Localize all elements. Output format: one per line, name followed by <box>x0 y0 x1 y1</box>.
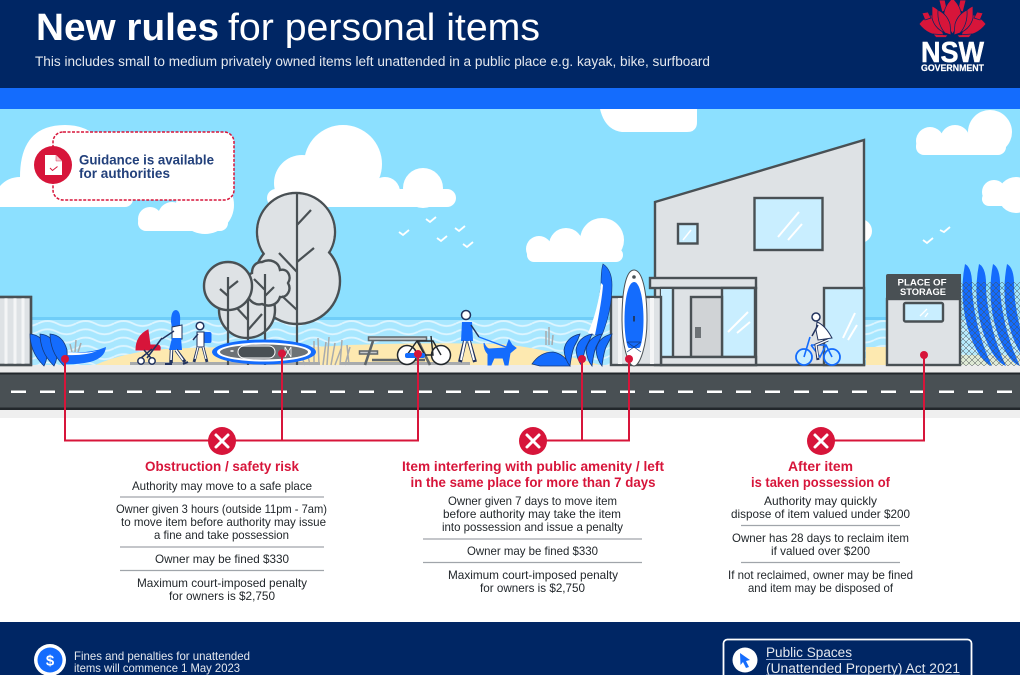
title: New rules <box>36 7 219 49</box>
ground shadow <box>130 362 320 365</box>
place of storage: STORAGE <box>900 287 946 297</box>
leaning surfboard <box>588 264 612 335</box>
blue kayak pile right <box>532 334 612 366</box>
text rows: Maximum court-imposed penalty <box>448 568 618 582</box>
callout text: for authorities <box>79 166 170 181</box>
picnic table <box>360 337 430 365</box>
small window <box>678 224 698 244</box>
left shed <box>0 297 31 365</box>
shed with boards <box>611 297 661 365</box>
text rows: Owner may be fined $330 <box>467 544 598 558</box>
NSW Government logo: GOVERNMENT <box>921 63 984 74</box>
column: obstruction / safety risk <box>116 427 327 603</box>
text rows: before authority may take the item <box>443 507 621 521</box>
heading: Item interfering with public amenity / left <box>402 458 664 474</box>
icon: document <box>34 146 72 184</box>
footer panel <box>0 622 1020 675</box>
column: after possession <box>728 427 913 595</box>
trees <box>204 193 340 365</box>
bicycle <box>398 336 450 364</box>
text rows: and item may be disposed of <box>748 581 894 595</box>
clouds <box>0 109 1020 262</box>
beach scene illustration <box>0 109 1020 418</box>
kayak <box>212 340 316 364</box>
title: for personal items <box>228 7 540 49</box>
icon: cross <box>807 427 835 455</box>
icon: dollar <box>34 644 66 675</box>
icon: cursor <box>732 648 758 672</box>
text rows: Maximum court-imposed penalty <box>137 576 307 590</box>
header panel <box>0 0 1020 88</box>
text rows: a fine and take possession <box>154 528 289 542</box>
callout: guidance <box>34 132 234 200</box>
text rows: for owners is $2,750 <box>480 581 585 595</box>
person walking dog <box>460 310 516 365</box>
grass <box>70 327 553 365</box>
text rows: dispose of item valued under $200 <box>731 507 910 521</box>
awning and porch <box>650 278 756 365</box>
building <box>650 140 864 365</box>
lower right window <box>824 288 864 365</box>
sand <box>95 343 1020 365</box>
paddleboard <box>622 270 647 366</box>
callout text: Guidance is available <box>79 152 214 168</box>
commencement text: Fines and penalties for unattended <box>74 649 250 663</box>
text rows <box>116 479 327 603</box>
blue kayak pile left <box>30 334 106 366</box>
stroller <box>136 330 162 364</box>
icon: dollar: $ <box>46 652 55 670</box>
text rows: Authority may move to a safe place <box>132 479 312 493</box>
heading: Obstruction / safety risk <box>145 458 299 474</box>
act link: Public Spaces <box>766 645 852 660</box>
text rows: if valued over $200 <box>771 544 870 558</box>
icon: cross <box>519 427 547 455</box>
heading: is taken possession of <box>751 474 890 490</box>
woman walking <box>162 310 188 364</box>
text rows: Owner may be fined $330 <box>155 552 289 566</box>
dog <box>484 340 516 365</box>
birds <box>399 217 950 247</box>
water <box>0 317 1020 365</box>
text rows: If not reclaimed, owner may be fined <box>728 568 913 582</box>
place of storage <box>886 274 961 365</box>
text rows: Owner given 7 days to move item <box>448 494 617 508</box>
connector lines <box>61 350 928 440</box>
blue band <box>0 88 1020 109</box>
icon: cross <box>208 427 236 455</box>
place of storage: PLACE OF <box>898 278 947 288</box>
heading: in the same place for more than 7 days <box>410 474 656 490</box>
text rows: for owners is $2,750 <box>169 589 275 603</box>
text rows <box>728 494 913 595</box>
large window <box>754 198 822 250</box>
heading: After item <box>788 458 853 474</box>
text rows: into possession and issue a penalty <box>442 520 623 534</box>
child walking <box>193 322 212 362</box>
link box <box>724 640 972 675</box>
fence with blue surfboards <box>961 264 1020 366</box>
text rows: Owner has 28 days to reclaim item <box>732 531 909 545</box>
text rows: Authority may quickly <box>764 494 877 508</box>
pavement and road <box>0 365 1020 418</box>
NSW Government logo <box>919 0 986 74</box>
column: public amenity <box>402 427 664 595</box>
text rows <box>423 494 642 595</box>
text rows: to move item before authority may issue <box>121 515 326 529</box>
cyclist <box>796 313 840 365</box>
commencement text: items will commence 1 May 2023 <box>74 661 240 675</box>
subtitle: This includes small to medium privately owned items left unattended in a public place e.g. kayak, bike, surfboard <box>35 54 710 69</box>
text rows: Owner given 3 hours (outside 11pm - 7am) <box>116 502 327 516</box>
NSW Government logo: NSW <box>921 37 985 69</box>
